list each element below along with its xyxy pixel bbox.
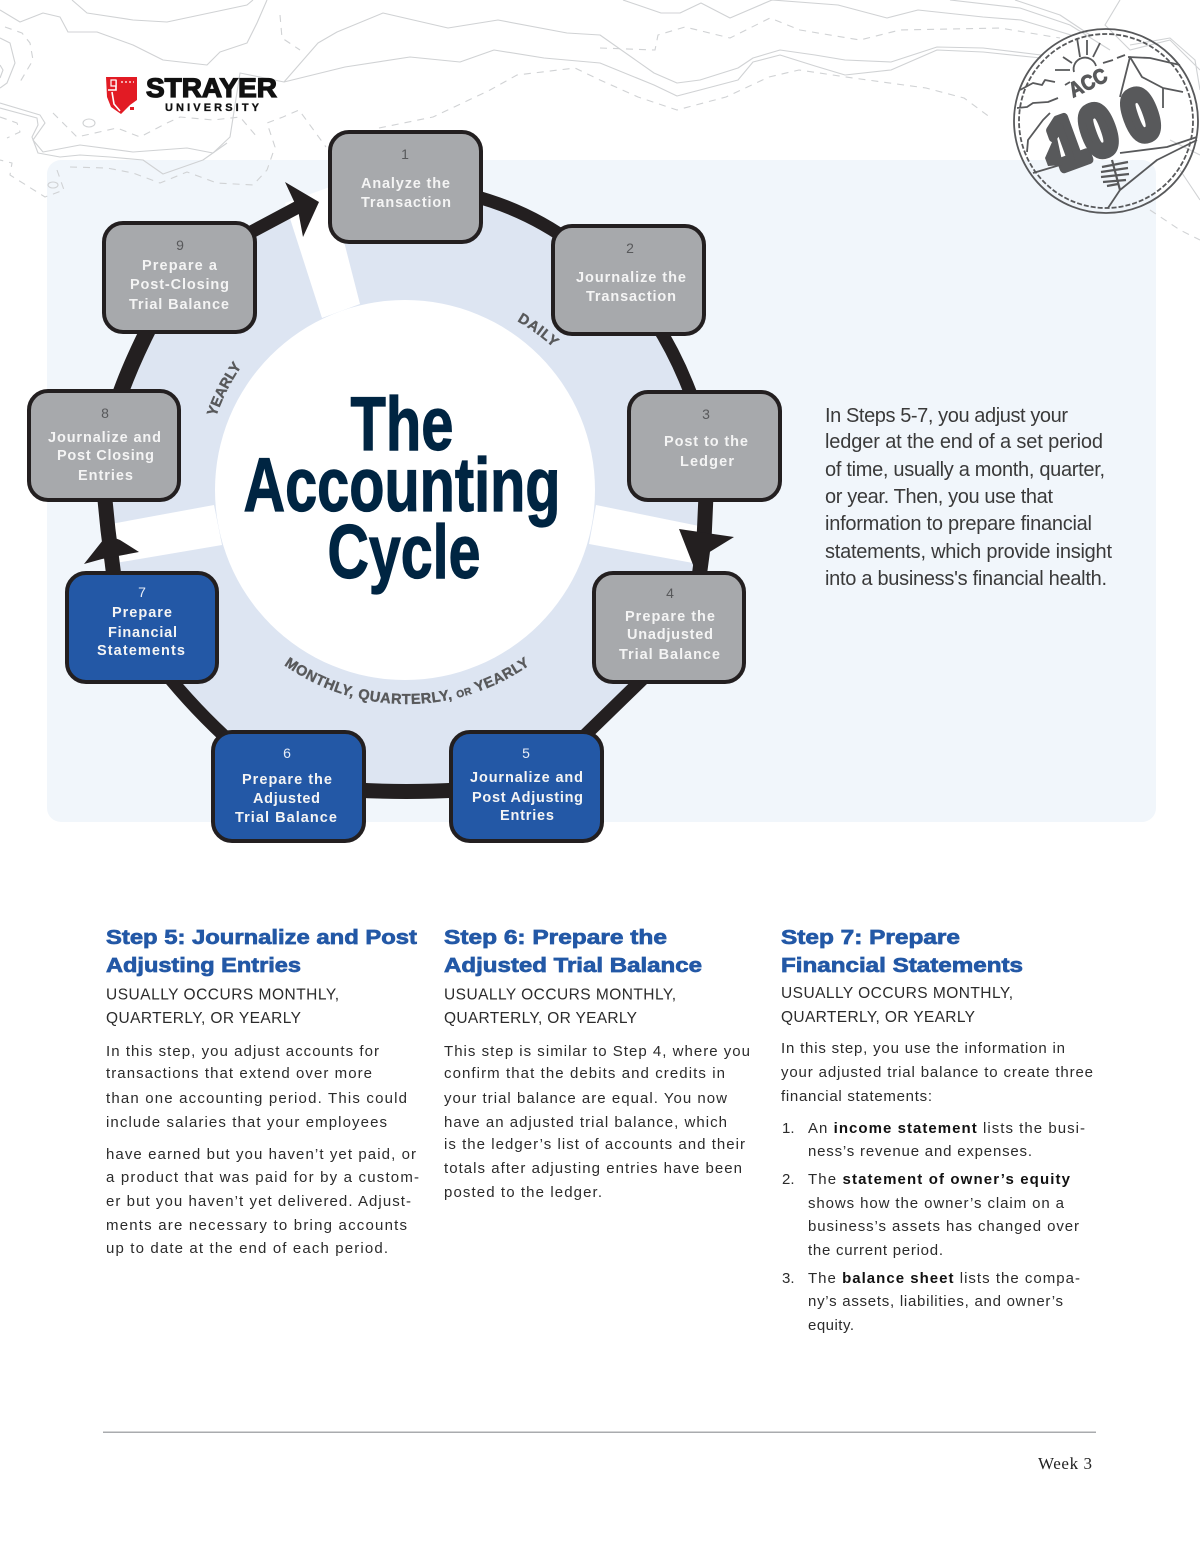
step 2: Journalize the	[576, 270, 686, 286]
body: step 5: include salaries that your employees	[106, 1114, 387, 1131]
logo: Strayer University	[106, 73, 277, 114]
step 3: Ledger	[680, 454, 734, 470]
step 5: Journalize and	[470, 770, 583, 786]
heading: step 6: Step 6: Prepare the	[444, 927, 667, 949]
step 9: Post-Closing	[130, 277, 229, 293]
list: financial statements: equity.	[808, 1317, 854, 1334]
step 6: Adjusted	[253, 791, 320, 807]
ring gap: right	[589, 505, 704, 565]
step 7: Financial	[108, 625, 177, 641]
step 9	[104, 223, 255, 332]
stamp number: 100	[1038, 72, 1170, 184]
body: step 5: have earned but you haven’t yet paid, or	[106, 1146, 416, 1163]
step 6: Trial Balance	[235, 810, 337, 826]
list: financial statements: the current period.	[808, 1242, 943, 1259]
icon: red shield	[106, 77, 137, 114]
body: step 5	[106, 1043, 419, 1257]
list: financial statements: 2.	[782, 1171, 795, 1188]
heading: step 7: Financial Statements	[781, 955, 1023, 977]
body: step 7: financial statements:	[781, 1088, 932, 1105]
text block: steps 5-7 intro: In Steps 5-7, you adjust your	[825, 405, 1068, 427]
step 2	[553, 226, 704, 334]
step 2: Transaction	[586, 289, 676, 305]
panel: light blue background	[47, 160, 1156, 822]
step 5: Post Adjusting	[472, 790, 583, 806]
step 9: Prepare a	[142, 258, 218, 274]
title: The	[350, 382, 454, 467]
body: step 6: posted to the ledger.	[444, 1184, 602, 1201]
body: step 5: than one accounting period. This could	[106, 1090, 407, 1107]
arrows between steps	[84, 182, 734, 792]
list: financial statements: ness’s revenue and expenses.	[808, 1143, 1032, 1160]
frequency: step 7: USUALLY OCCURS MONTHLY,	[781, 985, 1013, 1002]
step 4: 4	[666, 585, 674, 601]
step 1: 1	[401, 146, 409, 162]
title	[244, 382, 560, 595]
body: step 7	[781, 1040, 1093, 1105]
curved labels: DAILY	[518, 312, 560, 346]
wordmark subtitle: UNIVERSITY	[165, 102, 260, 114]
body: step 5: In this step, you adjust accounts for	[106, 1043, 379, 1060]
frequency: step 7: QUARTERLY, OR YEARLY	[781, 1009, 975, 1026]
text block: steps 5-7 intro: information to prepare financial	[825, 513, 1092, 535]
list: financial statements: The balance sheet lists the compa-	[808, 1270, 1080, 1287]
step 3: 3	[702, 406, 710, 422]
step 2: 2	[626, 240, 634, 256]
step 8	[29, 391, 179, 500]
heading: step 6: Adjusted Trial Balance	[444, 955, 702, 977]
body: step 6: This step is similar to Step 4, where you	[444, 1043, 750, 1060]
footer: week label: Week 3	[1038, 1454, 1092, 1473]
step 7: 7	[138, 584, 146, 600]
step 9: 9	[176, 237, 184, 253]
footer rule	[103, 1432, 1096, 1433]
step 3: Post to the	[664, 434, 748, 450]
heading: step 5	[106, 927, 417, 977]
cycle diagram	[27, 130, 782, 843]
body: step 6: is the ledger’s list of accounts and their	[444, 1136, 745, 1153]
text block: steps 5-7 intro: or year. Then, you use that	[825, 486, 1053, 508]
step 8: Journalize and	[48, 430, 161, 446]
step 5: 5	[522, 745, 530, 761]
title: Accounting	[244, 443, 560, 528]
list: financial statements: An income statement lists the busi-	[808, 1120, 1085, 1137]
text block: steps 5-7 intro: into a business's financial health.	[825, 568, 1107, 590]
column: step 7	[781, 927, 1093, 1334]
column: step 6	[444, 927, 750, 1201]
step 3	[629, 392, 780, 500]
step 8: 8	[101, 405, 109, 421]
column: step 5	[106, 927, 419, 1257]
step 1: Transaction	[361, 195, 451, 211]
heading: step 7	[781, 927, 1023, 977]
step 4: Prepare the	[625, 609, 715, 625]
step 4: Trial Balance	[619, 647, 720, 663]
body: step 6: have an adjusted trial balance, which	[444, 1114, 727, 1131]
step 9: Trial Balance	[129, 297, 229, 313]
text block: steps 5-7 intro	[825, 405, 1112, 590]
list: financial statements: ny’s assets, liabilities, and owner’s	[808, 1293, 1063, 1310]
body: step 6: confirm that the debits and credits in	[444, 1065, 725, 1082]
frequency: step 5	[106, 986, 339, 1027]
step 6: 6	[283, 745, 291, 761]
title: Cycle	[328, 510, 480, 595]
step 1	[330, 132, 481, 242]
step 8: Post Closing	[57, 448, 154, 464]
topographic contour background	[0, 0, 1200, 240]
step 4: Unadjusted	[627, 627, 713, 643]
center circle	[215, 300, 595, 680]
curved labels: YEARLY	[206, 360, 240, 414]
body: step 5: a product that was paid for by a custom-	[106, 1169, 419, 1186]
body: step 5: ments are necessary to bring accounts	[106, 1217, 407, 1234]
step 7: Prepare	[112, 605, 172, 621]
step 6	[213, 732, 364, 841]
body: step 5: transactions that extend over more	[106, 1065, 372, 1082]
step 7	[67, 573, 217, 682]
body: step 6: your trial balance are equal. You now	[444, 1090, 727, 1107]
list: financial statements: The statement of owner’s equity	[808, 1171, 1071, 1188]
body: step 7: In this step, you use the information in	[781, 1040, 1065, 1057]
heading: step 5: Adjusting Entries	[106, 955, 301, 977]
step 7: Statements	[97, 643, 185, 659]
heading: step 6	[444, 927, 702, 977]
frequency: step 5: USUALLY OCCURS MONTHLY,	[106, 986, 339, 1004]
list: financial statements: 1.	[782, 1120, 795, 1137]
stamp: ACC 100 badge	[1014, 29, 1198, 213]
body: step 6	[444, 1043, 750, 1201]
icon: stamp pine trees	[1045, 133, 1129, 190]
body: step 6: totals after adjusting entries have been	[444, 1160, 742, 1177]
ring gap: left	[100, 505, 222, 565]
stamp label: ACC	[1065, 64, 1111, 102]
body: step 7: your adjusted trial balance to create three	[781, 1064, 1093, 1081]
heading: step 7: Step 7: Prepare	[781, 927, 960, 949]
body: step 5: er but you haven’t yet delivered. Adjust-	[106, 1193, 411, 1210]
ring gap: top left	[285, 187, 360, 318]
list: financial statements: 3.	[782, 1270, 795, 1287]
text block: steps 5-7 intro: of time, usually a month, quarter,	[825, 459, 1105, 481]
wordmark: STRAYER	[146, 73, 277, 103]
list: financial statements	[782, 1120, 1085, 1334]
frequency: step 5: QUARTERLY, OR YEARLY	[106, 1010, 301, 1027]
curved labels: MONTHLY, QUARTERLY, OR YEARLY	[284, 656, 528, 704]
body: step 5: up to date at the end of each period.	[106, 1240, 388, 1257]
step 1: Analyze the	[361, 176, 450, 192]
step 5: Entries	[500, 808, 554, 824]
list: financial statements: business’s assets has changed over	[808, 1218, 1079, 1235]
frequency: step 6	[444, 986, 676, 1027]
curved labels	[206, 312, 560, 704]
disc: light blue ring	[104, 190, 704, 790]
text block: steps 5-7 intro: statements, which provide insight	[825, 541, 1112, 563]
frequency: step 6: USUALLY OCCURS MONTHLY,	[444, 986, 676, 1004]
heading: step 5: Step 5: Journalize and Post	[106, 927, 417, 949]
list: financial statements: shows how the owner’s claim on a	[808, 1195, 1065, 1212]
step 6: Prepare the	[242, 772, 332, 788]
step 4	[594, 573, 744, 682]
step 5	[451, 732, 602, 841]
frequency: step 6: QUARTERLY, OR YEARLY	[444, 1010, 637, 1027]
step 8: Entries	[78, 468, 133, 484]
text block: steps 5-7 intro: ledger at the end of a set period	[825, 431, 1103, 453]
frequency: step 7	[781, 985, 1013, 1026]
